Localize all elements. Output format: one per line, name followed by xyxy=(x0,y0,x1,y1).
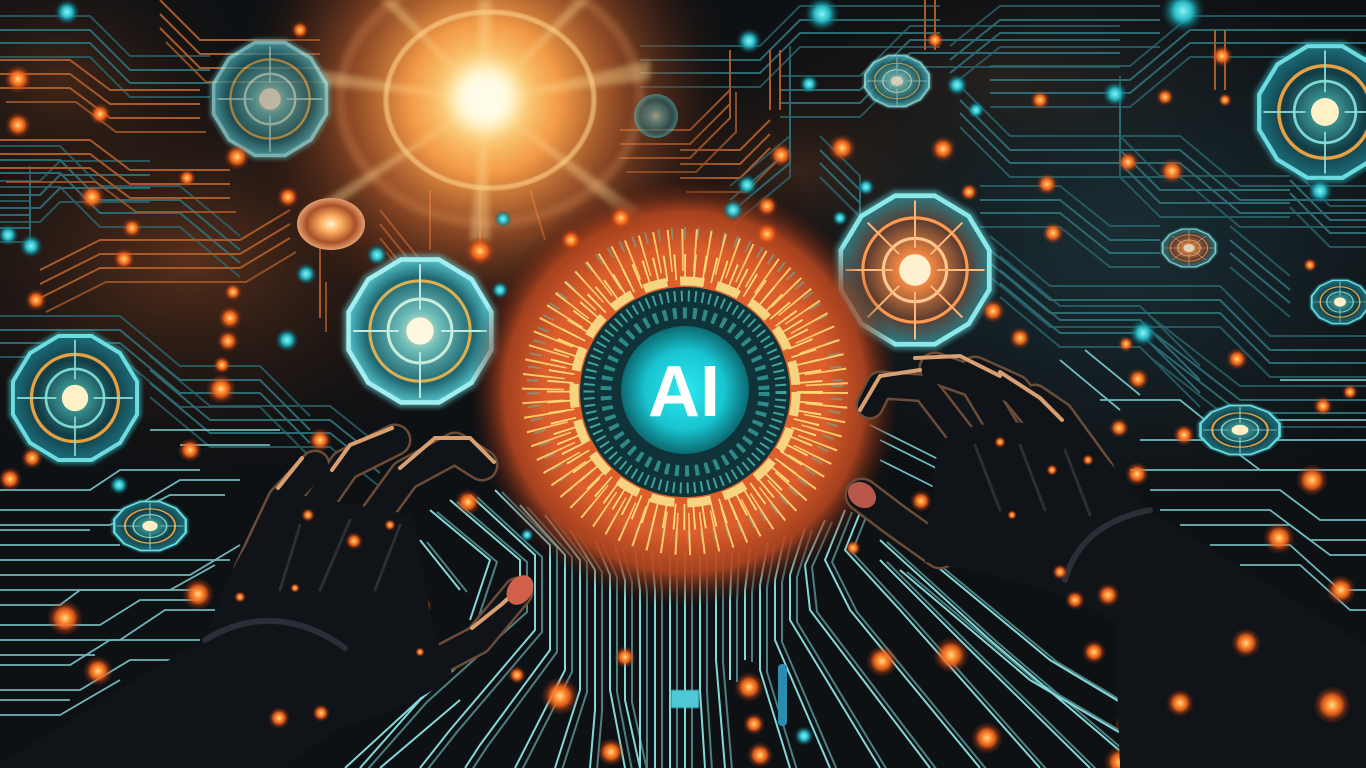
chip: right edge xyxy=(1312,280,1366,324)
golden rays xyxy=(543,250,827,534)
foreground sleeve lights xyxy=(268,583,1351,729)
left hand finger outlines xyxy=(248,440,518,665)
chip: lower right small xyxy=(1201,406,1279,454)
circuit traces: lower right xyxy=(870,350,1366,610)
circuit traces: lower left xyxy=(0,430,280,715)
chip: lower left small xyxy=(114,502,186,550)
AI core xyxy=(470,177,900,607)
dark inner disc xyxy=(580,287,790,497)
right hand thumb tip xyxy=(843,477,881,513)
chip: left of AI core xyxy=(349,260,491,402)
chip: small near sun xyxy=(634,94,678,138)
right hand lights xyxy=(994,436,1094,610)
sunburst glow xyxy=(235,0,735,348)
circuit traces: upper area xyxy=(0,0,1366,487)
bottom teal component xyxy=(671,664,787,726)
right hand metal joints xyxy=(860,356,1062,420)
right hand knuckles and wrist xyxy=(975,445,1150,580)
robotic hand: left xyxy=(0,428,539,768)
left hand metal joints xyxy=(278,428,528,628)
right hand finger outlines xyxy=(862,368,1100,552)
chip: upper right small xyxy=(1163,229,1215,267)
circuit traces: fan below the AI core xyxy=(345,490,1237,768)
chip: far left xyxy=(13,336,137,460)
chip: right of AI core xyxy=(841,196,989,344)
left hand palm and forearm xyxy=(0,495,452,768)
background glow washes xyxy=(0,0,1366,500)
core glow xyxy=(470,177,900,607)
chip: top center right xyxy=(865,56,929,106)
chip: top left xyxy=(214,43,326,155)
floating chips xyxy=(13,43,1366,550)
left hand lights xyxy=(234,508,425,657)
cyan centre xyxy=(621,326,749,454)
AI label: AI xyxy=(648,352,720,432)
outer teal tick ring xyxy=(533,233,837,537)
inner data rings xyxy=(589,296,781,488)
chip: top right xyxy=(1259,46,1366,178)
right hand palm and forearm xyxy=(925,422,1366,768)
left hand fingertip xyxy=(501,570,539,610)
left hand knuckles and wrist xyxy=(205,520,400,648)
chip: orange near sun xyxy=(297,198,365,250)
left hand fingers xyxy=(248,440,518,665)
gold segmented ring xyxy=(574,281,796,503)
right hand fingers xyxy=(862,368,1100,552)
robotic hand: right xyxy=(843,356,1366,768)
